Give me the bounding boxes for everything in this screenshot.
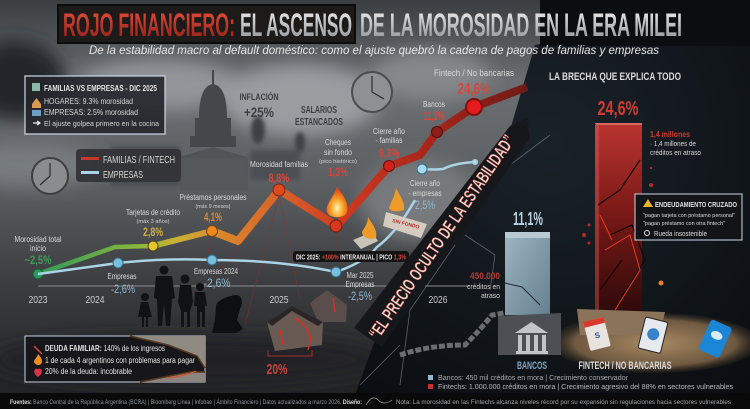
bar: bancos (498, 232, 561, 355)
label: 1,4 millones: 1,4 millones (650, 129, 690, 139)
label: cheques: sin fondo (324, 148, 352, 157)
panel: endeudamiento cruzado: "pagan tarjeta con préstamo personal" (643, 213, 735, 219)
phone: fintech 2 (638, 317, 668, 353)
node: préstamos (206, 226, 218, 236)
node: empresas 2024b (207, 255, 217, 265)
panel: deuda familiar: DEUDA FAMILIAR: 140% de los ingresos (45, 344, 165, 353)
burnt paper corners (130, 336, 205, 368)
annotation: inflación: INFLACIÓN (240, 91, 279, 103)
label: tarjetas: Tarjetas de crédito (126, 208, 180, 217)
legend: bancos vs fintech: Fintechs: 1.000.000 créditos en mora | Crecimiento agresivo del 88% en sectores vulnerables (438, 384, 734, 391)
label: morosidad familias: Morosidad familias (250, 160, 308, 169)
annotation: inflación: +25% (244, 104, 274, 120)
icon: bank (515, 322, 548, 354)
title: EL ASCENSO (240, 7, 352, 43)
label: cierre familias: 9,3% (379, 146, 399, 160)
icon: broken heart (34, 369, 42, 377)
label: empresas 2024: -2,6% (204, 276, 231, 290)
icon: congress building silhouette (110, 70, 300, 190)
label: préstamos: Préstamos personales (180, 193, 246, 202)
panel: familias vs empresas: EMPRESAS: 2.5% morosidad (44, 108, 138, 117)
chain (400, 312, 510, 355)
node: cierre familias (384, 160, 394, 172)
annotation: salarios estancados: ESTANCADOS (295, 117, 343, 128)
label: préstamos: 4,1% (204, 210, 222, 224)
label: cheques (319, 138, 357, 179)
icon: arrow (33, 121, 40, 125)
icon: flame on chart (327, 187, 348, 217)
node: cierre empresas (417, 164, 427, 174)
icon: factory (32, 110, 41, 116)
node: empresas 2024 (113, 258, 123, 268)
title: ROJO FINANCIERO: (63, 7, 235, 43)
node: inicio (33, 269, 43, 279)
label: bancos: 11,1% (424, 109, 445, 123)
illustration: kneeling person (212, 295, 243, 333)
label: 1,4 millones (650, 129, 701, 157)
label: 450.000 (467, 271, 500, 300)
label: morosidad total (14, 235, 62, 267)
callout: dic 2025: DIC 2025: +100% INTERANUAL | PICO 1,3% (296, 252, 406, 262)
sand ground (550, 313, 750, 373)
annotation: salarios estancados (295, 105, 343, 128)
smoke columns (251, 116, 305, 152)
icon: warning (643, 199, 653, 207)
spark (658, 280, 664, 286)
icon: burning checks (353, 217, 378, 249)
label: mar 2025: -2,5% (348, 289, 372, 303)
value: 11,1%: 11,1% (513, 209, 543, 229)
label: morosidad total: inicio (30, 244, 46, 253)
legend: bancos vs fintech: Bancos: 450 mil créditos en mora | Crecimiento conservador (438, 375, 629, 382)
label: morosidad familias (250, 160, 308, 185)
legend: lines: FAMILIAS / FINTECH (103, 154, 175, 166)
label: bancos: Bancos (423, 100, 445, 109)
label: morosidad total: ~2,5% (24, 253, 52, 267)
label: bancos: BANCOS (517, 360, 547, 372)
title box (58, 5, 355, 43)
node: fintech (466, 99, 482, 115)
panel: deuda familiar: 20% de la deuda: incobrable (45, 367, 132, 376)
label: empresas: -2,6% (111, 282, 135, 296)
banner: el precio oculto de la estabilidad (354, 118, 530, 347)
label: empresas 2024 (194, 267, 238, 290)
label: empresas: Empresas (108, 272, 136, 281)
panel: endeudamiento cruzado: Rueda insostenible (654, 231, 707, 238)
icon: cycle (644, 230, 650, 236)
label: mar 2025 (346, 271, 374, 303)
panel: deuda familiar: 1 de cada 4 argentinos con problemas para pagar (45, 356, 195, 365)
chart axis with years: 2026 (428, 295, 448, 306)
background: dark top band right (540, 0, 750, 46)
label: cheques: (pico histórico) (319, 159, 357, 165)
label: tarjetas: 2,8% (143, 225, 163, 239)
label: cierre empresas: 2,5% (415, 198, 435, 212)
node: bancos (432, 126, 442, 138)
label: cheques: Cheques (325, 138, 351, 147)
label: 1,4 millones: · 1,4 millones de (650, 139, 696, 148)
footer: Nota: La morosidad en las Fintechs alcanza niveles récord por su expansión sin regulaciones hacia sectores vulnerables (396, 400, 731, 406)
label: 20%: 20% (266, 361, 288, 378)
label: préstamos (180, 193, 246, 224)
icon: chart (32, 83, 40, 91)
icon: falling chart (34, 346, 42, 354)
label: 450.000: créditos en (467, 282, 500, 291)
node: tarjetas (148, 241, 158, 251)
line: familias / fintech (33, 87, 527, 279)
annotation: inflación (240, 91, 279, 120)
value: 24,6%: 24,6% (598, 98, 639, 120)
label: fintech: 24,6% (458, 81, 490, 98)
illustration: family silhouettes (138, 266, 207, 327)
icon: burning documents: SIN FONDO (392, 218, 420, 231)
phone: fintech 3 (698, 319, 732, 358)
icon: house (32, 98, 41, 108)
node: end (472, 159, 478, 165)
footer: Fuentes: Banco Central de la República Argentina (BCRA) | Bloomberg Línea | Infobae | Ámbito Financiero | Datos actualizados a marzo 2026. Diseño: (10, 399, 362, 406)
chart axis with years: 2023 (28, 295, 48, 306)
icon: clock top (352, 72, 392, 112)
icon: burning documents (383, 188, 427, 238)
panel: familias vs empresas: El ajuste golpea primero en la cocina (44, 119, 160, 128)
label: morosidad total: Morosidad total (14, 235, 62, 244)
label: mar 2025: Mar 2025 (346, 271, 374, 280)
chart axis with years: 2024 (86, 295, 105, 306)
bar: fintech (577, 123, 665, 335)
label: empresas 2024: Empresas 2024 (194, 267, 238, 276)
panel: endeudamiento cruzado (635, 194, 742, 240)
node: mar 2025 (331, 267, 341, 277)
label: 450.000: atraso (481, 291, 500, 300)
red guide lines from chart (205, 195, 337, 325)
phone: fintech 1: S (594, 330, 602, 340)
label: cierre familias: Cierre año (373, 127, 405, 136)
label: tarjetas: (máx 3 años) (136, 219, 170, 225)
legend: lines: EMPRESAS (103, 169, 143, 181)
label: cierre familias (373, 127, 405, 160)
label: bancos (423, 100, 445, 123)
subtitle: De la estabilidad macro al default doméstico: como el ajuste quebró la cadena de pagos de familias y empresas (89, 45, 659, 57)
label: cierre empresas (408, 179, 442, 212)
label: fintech: Fintech / No bancarias (434, 68, 514, 79)
pedestal (498, 313, 561, 355)
label: cierre empresas: Cierre año (410, 179, 440, 188)
pedestal (577, 309, 665, 335)
panel: familias vs empresas (25, 76, 165, 134)
line: empresas (38, 159, 478, 277)
label: cierre familias: - familias (376, 136, 402, 145)
label: fintech / no bancarias: FINTECH / NO BANCARIAS (578, 360, 672, 372)
label: 1,4 millones: créditos en atraso (650, 148, 701, 157)
icon: clock left (32, 158, 68, 194)
label: tarjetas (126, 208, 180, 239)
heading: la brecha: LA BRECHA QUE EXPLICA TODO (549, 71, 681, 83)
panel: deuda familiar (25, 336, 205, 382)
droplets (582, 167, 653, 244)
label: cheques: 1,3% (328, 165, 348, 179)
node: morosidad familias (273, 184, 285, 196)
background: dark right side (350, 0, 750, 409)
panel: familias vs empresas: FAMILIAS VS EMPRESAS - DIC 2025 (44, 84, 157, 93)
phone: fintech 1 (583, 317, 611, 351)
node: cheques (330, 220, 342, 232)
label: morosidad familias: 8,8% (268, 171, 290, 185)
label: fintech (434, 68, 514, 98)
title (58, 5, 682, 43)
signature (366, 398, 392, 405)
label: 450.000: 450.000 (470, 271, 500, 281)
legend: lines (76, 149, 181, 182)
chart axis with years: 2025 (270, 295, 289, 306)
label: préstamos: (máx 9 meses) (196, 204, 231, 210)
panel: familias vs empresas: HOGARES: 9.3% morosidad (44, 97, 133, 106)
cracks on dark side (360, 135, 550, 385)
legend: bancos vs fintech (428, 375, 734, 391)
chart axis with years (28, 286, 470, 306)
label: empresas (108, 272, 136, 296)
footer (0, 393, 750, 409)
icon: flame (34, 354, 42, 365)
banner: el precio oculto de la estabilidad: “EL PRECIO OCULTO DE LA ESTABILIDAD” (365, 131, 519, 343)
label: mar 2025: Empresas (346, 280, 374, 289)
annotation: salarios estancados: SALARIOS (301, 105, 337, 116)
illustration: cracked houses (267, 290, 347, 356)
label: cierre empresas: - empresas (408, 189, 442, 198)
panel: endeudamiento cruzado: "pagan préstamo con otra fintech" (643, 221, 725, 227)
